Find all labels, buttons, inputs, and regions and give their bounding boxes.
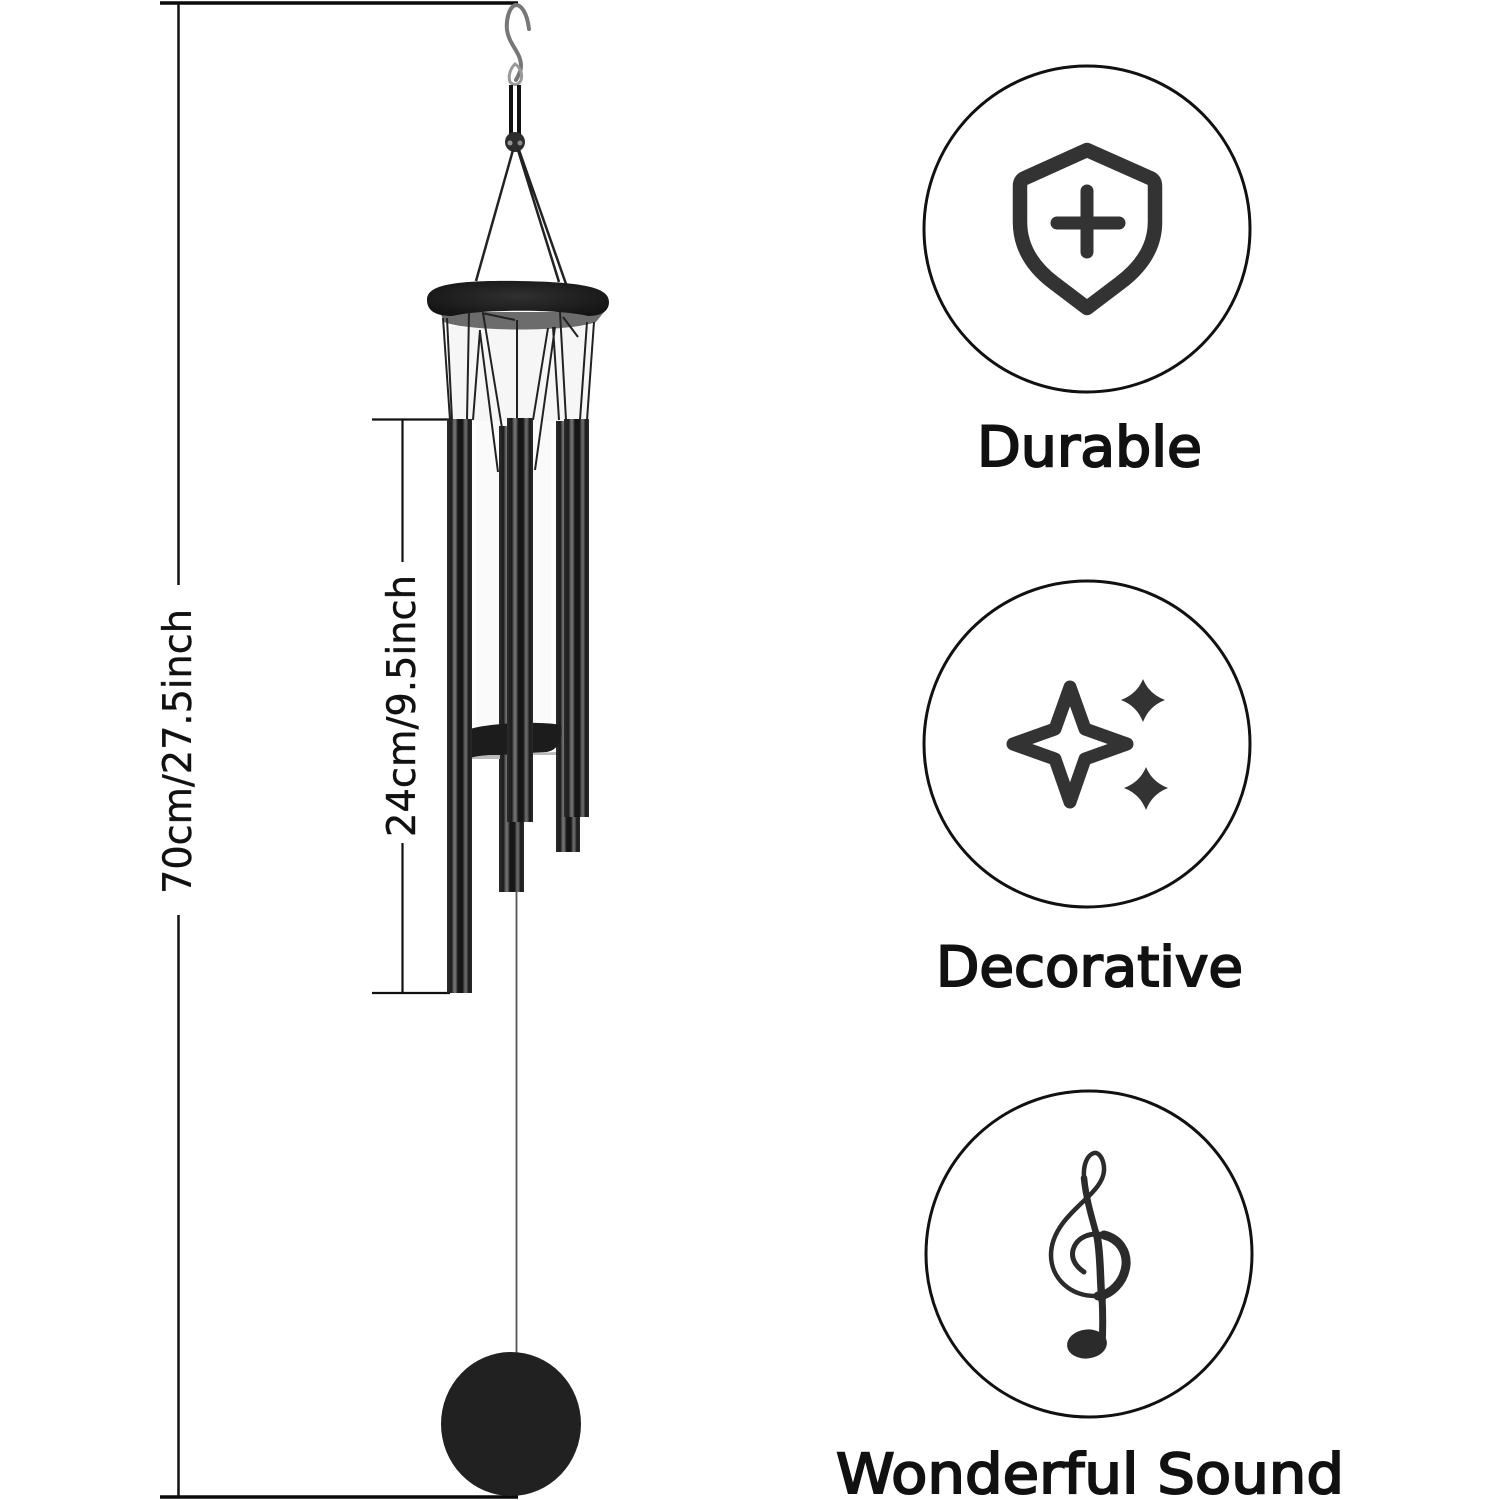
- front tube centre: [507, 418, 533, 822]
- back tube right: [556, 421, 580, 852]
- circle: [924, 66, 1250, 392]
- feature: wonderful sound: [836, 1091, 1344, 1500]
- wind chime product: [427, 5, 609, 1496]
- long tube left: [447, 419, 472, 993]
- pendulum line: [516, 892, 518, 1354]
- circle: [924, 581, 1250, 907]
- front tube right: [564, 419, 589, 817]
- bead: [505, 132, 525, 152]
- overall height dimension: [155, 3, 518, 1497]
- icon: sparkles: [1013, 680, 1167, 809]
- icon: treble clef note: [1051, 1153, 1126, 1346]
- label: Decorative: [936, 935, 1243, 999]
- tube length dimension: [372, 419, 450, 993]
- note head: [1066, 1327, 1108, 1361]
- hook: [507, 5, 529, 134]
- ring underside: [440, 312, 604, 330]
- icon: shield with plus: [1020, 150, 1155, 308]
- tube cords: [443, 312, 594, 472]
- label: tube length: 24cm/9.5inch: [379, 575, 425, 837]
- lower disc: [470, 723, 561, 758]
- feature: durable: [924, 66, 1250, 479]
- back tube centre: [499, 426, 524, 892]
- pendulum disc: [441, 1352, 581, 1496]
- label: overall height: 70cm/27.5inch: [155, 609, 201, 894]
- label: Durable: [977, 415, 1202, 479]
- faint tube interior shading: [450, 326, 590, 421]
- top ring: [427, 281, 609, 316]
- hanging cords: [476, 150, 566, 284]
- circle: [926, 1091, 1252, 1417]
- feature: decorative: [924, 581, 1250, 999]
